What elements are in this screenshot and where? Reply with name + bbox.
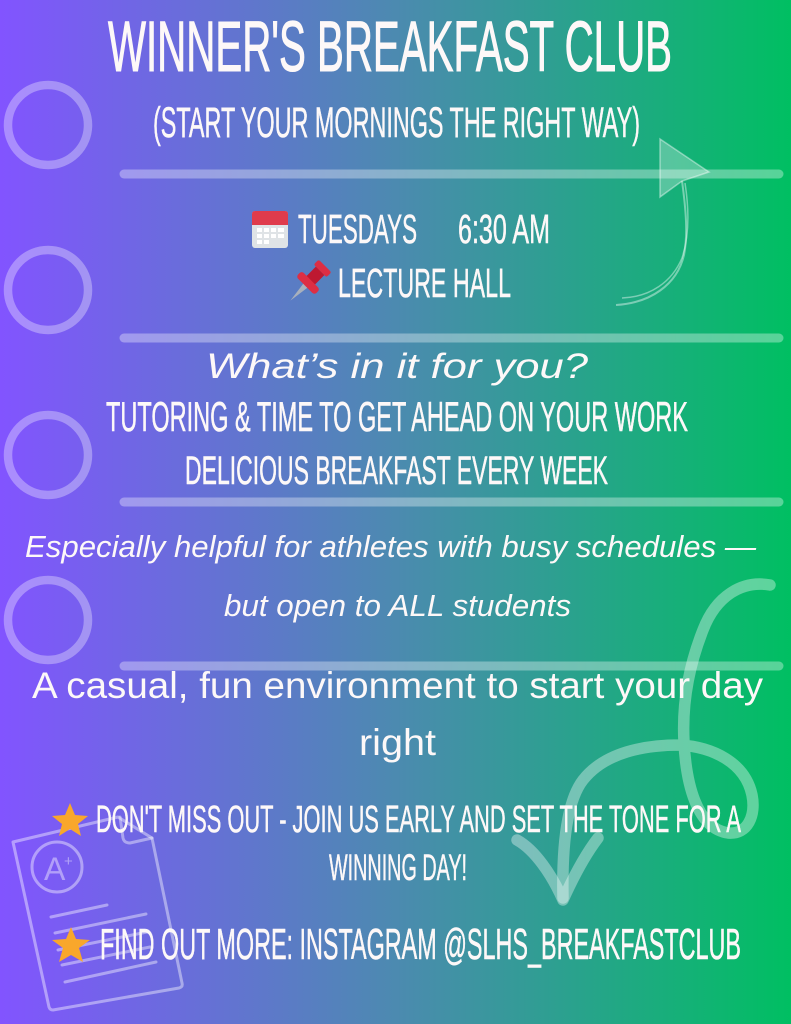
icon: graded paper A+: A	[44, 851, 66, 887]
time text: 6:30 AM	[458, 206, 550, 252]
icon: red pushpin	[281, 257, 334, 310]
icon: calendar	[252, 211, 288, 248]
icon: graded paper A+: +	[64, 853, 73, 870]
call to action continued: WINNING DAY!	[329, 847, 467, 888]
schedule text: TUESDAYS	[298, 206, 417, 252]
environment text continued: right	[359, 722, 437, 763]
environment text: A casual, fun environment to start your day	[32, 665, 764, 706]
note: open to all: but open to ALL students	[224, 588, 571, 623]
icon: hand-drawn arrow pointing up	[616, 139, 709, 305]
decorative checklist circles	[8, 85, 88, 660]
icon: large looping arrow pointing down	[517, 584, 770, 900]
icon: graded paper A+	[13, 817, 182, 1010]
decorative checklist lines	[124, 174, 779, 666]
location text: LECTURE HALL	[338, 260, 511, 306]
note about athletes: Especially helpful for athletes with busy schedules —	[25, 529, 757, 564]
icon: star	[52, 927, 90, 962]
section heading: What’s in it for you?	[206, 347, 589, 386]
icon: star	[52, 803, 88, 836]
